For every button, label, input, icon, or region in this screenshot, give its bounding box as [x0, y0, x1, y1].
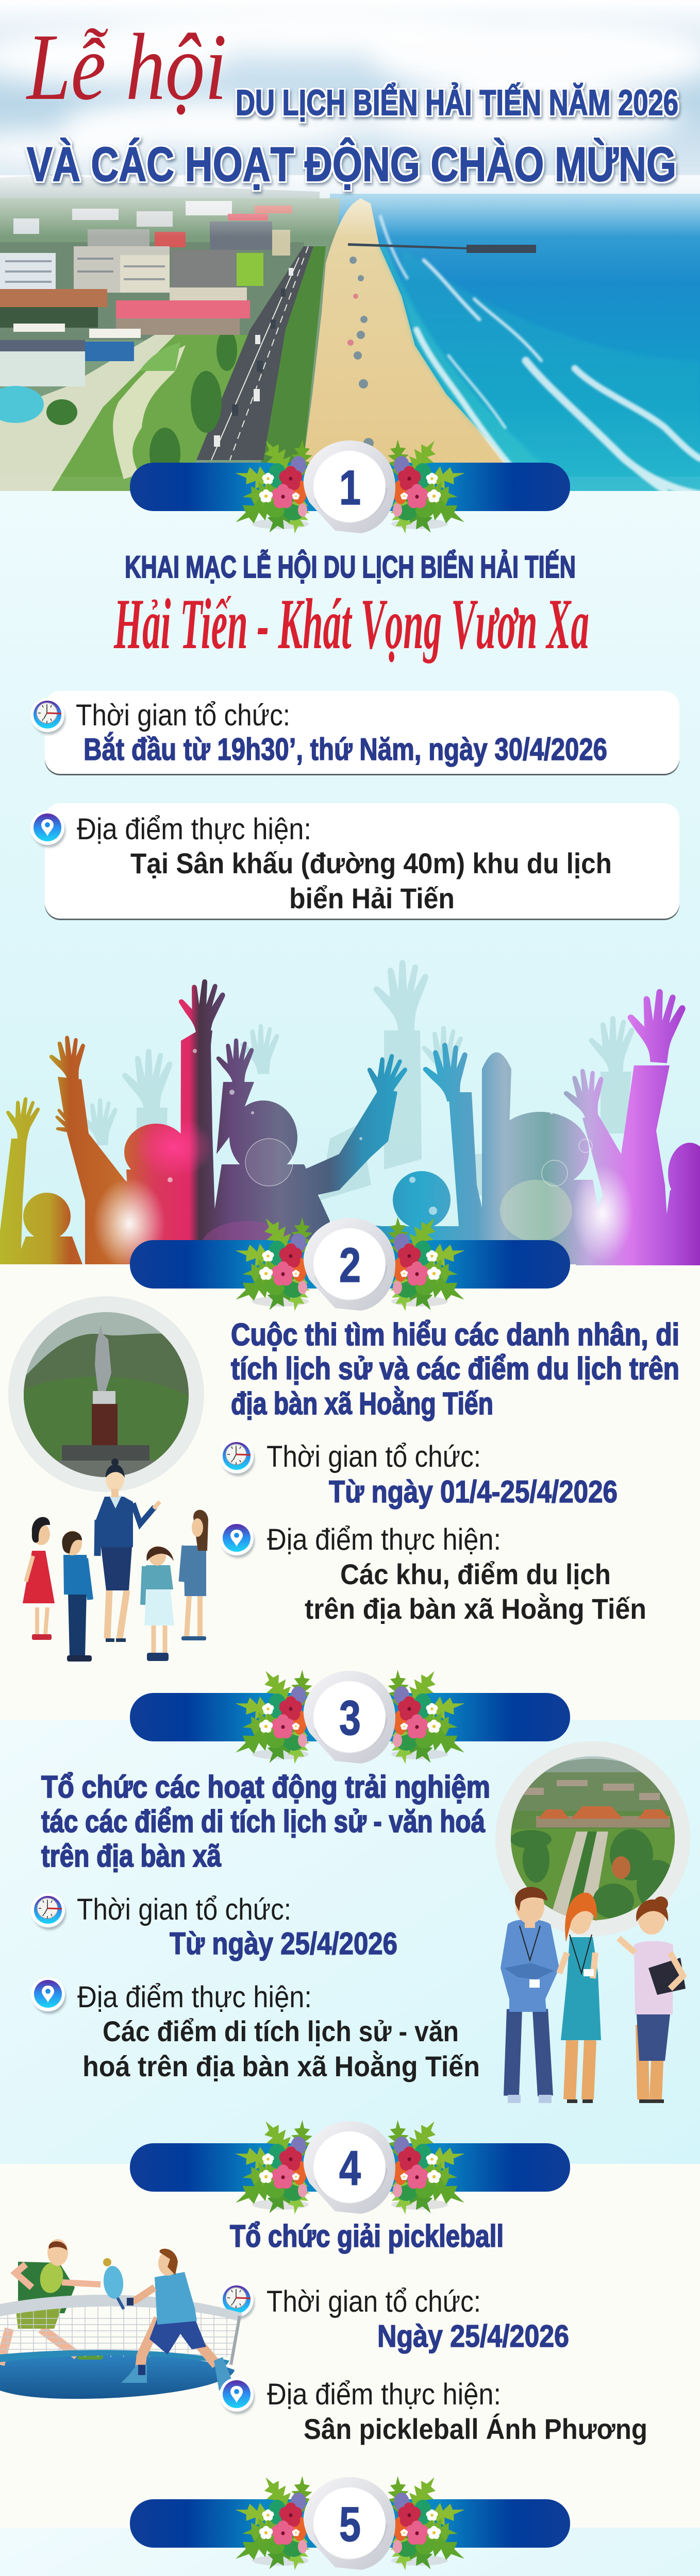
section 2 heading: địa bàn xã Hoằng Tiến: [231, 1386, 493, 1421]
label: venue: Địa điểm thực hiện:: [77, 812, 311, 846]
number 1: 1: [339, 461, 361, 515]
value: venue: [130, 847, 612, 914]
man: [501, 1887, 559, 2103]
illustration: guide and visitors: [23, 1459, 208, 1662]
woman behind: [181, 1510, 208, 1640]
number 5: 5: [339, 2497, 361, 2552]
value: venue: hoá trên địa bàn xã Hoằng Tiến: [82, 2050, 480, 2082]
value: time: Từ ngày 01/4-25/4/2026: [329, 1475, 618, 1509]
label: time: Thời gian tổ chức:: [266, 2285, 481, 2318]
far player: [0, 2239, 103, 2365]
section 3 heading: trên địa bàn xã: [41, 1839, 222, 1873]
near player: [121, 2249, 233, 2391]
background: section 5: [0, 2528, 700, 2576]
badge 1: [130, 434, 570, 540]
value: venue: trên địa bàn xã Hoằng Tiến: [305, 1592, 646, 1625]
title: Lễ hội script: Lễ hội: [26, 14, 227, 120]
label: venue: Địa điểm thực hiện:: [267, 1523, 501, 1556]
ball: [103, 2258, 111, 2266]
badge 3: [130, 1664, 570, 1771]
icon: clock: [30, 698, 65, 735]
value: venue: [305, 1558, 646, 1625]
woman in pink: [619, 1896, 686, 2103]
crowd illustration: [0, 960, 700, 1273]
header photo: beach panorama: [0, 0, 700, 495]
value: venue: biển Hải Tiến: [289, 882, 455, 914]
icon: clock: [220, 2283, 255, 2319]
section 3 heading: Tổ chức các hoạt động trải nghiệm: [41, 1770, 490, 1804]
badge 2: [130, 1211, 570, 1318]
number 4: 4: [339, 2141, 361, 2196]
value: venue: [82, 2015, 480, 2082]
value: time: Từ ngày 25/4/2026: [170, 1926, 397, 1961]
paddle: [102, 2265, 125, 2309]
badge 5: [130, 2470, 570, 2576]
number 2: 2: [339, 1238, 361, 1293]
section 3 heading: tác các điểm di tích lịch sử - văn hoá: [41, 1804, 486, 1839]
label: time: Thời gian tổ chức:: [77, 1893, 291, 1926]
net: [0, 2295, 242, 2365]
section 4 heading: Tổ chức giải pickleball: [230, 2219, 504, 2253]
label: time: Thời gian tổ chức:: [76, 699, 290, 732]
panel: venue: [30, 803, 679, 920]
panel: time: [30, 691, 679, 775]
girl in teal: [143, 1546, 174, 1661]
background: section 3: [0, 1720, 700, 2164]
court: [0, 2351, 235, 2399]
icon: clock: [31, 1893, 66, 1930]
round photo: monument: [8, 1296, 204, 1492]
value: venue: Các khu, điểm du lịch: [340, 1558, 611, 1590]
icon: pin: [220, 2378, 255, 2414]
boy in blue: [62, 1531, 92, 1662]
number 3: 3: [339, 1691, 361, 1745]
section 3 heading: [41, 1770, 490, 1873]
section 2 heading: [231, 1317, 679, 1421]
label: time: Thời gian tổ chức:: [266, 1440, 481, 1473]
icon: clock: [220, 1439, 255, 1476]
value: time: Ngày 25/4/2026: [377, 2319, 569, 2353]
value: venue: Tại Sân khấu (đường 40m) khu du lịch: [130, 847, 612, 879]
guide: [96, 1459, 160, 1642]
round photo: temple: [495, 1741, 690, 1936]
icon: pin: [220, 1521, 255, 1558]
icon: pin: [30, 811, 65, 848]
label: venue: Địa điểm thực hiện:: [267, 2378, 501, 2411]
background: section 1: [0, 491, 700, 1264]
value: venue: Các điểm di tích lịch sử - văn: [103, 2015, 459, 2047]
background: section 4: [0, 2164, 700, 2528]
icon: pin: [31, 1977, 66, 2014]
illustration: pickleball match: [0, 2239, 242, 2399]
illustration: three tourists: [501, 1887, 686, 2103]
girl in red: [23, 1517, 55, 1640]
background: section 2: [0, 1264, 700, 1720]
label: venue: Địa điểm thực hiện:: [77, 1980, 312, 2014]
badge 4: [130, 2114, 570, 2221]
woman in teal: [559, 1893, 601, 2103]
value: venue: Sân pickleball Ánh Phương: [304, 2413, 647, 2445]
